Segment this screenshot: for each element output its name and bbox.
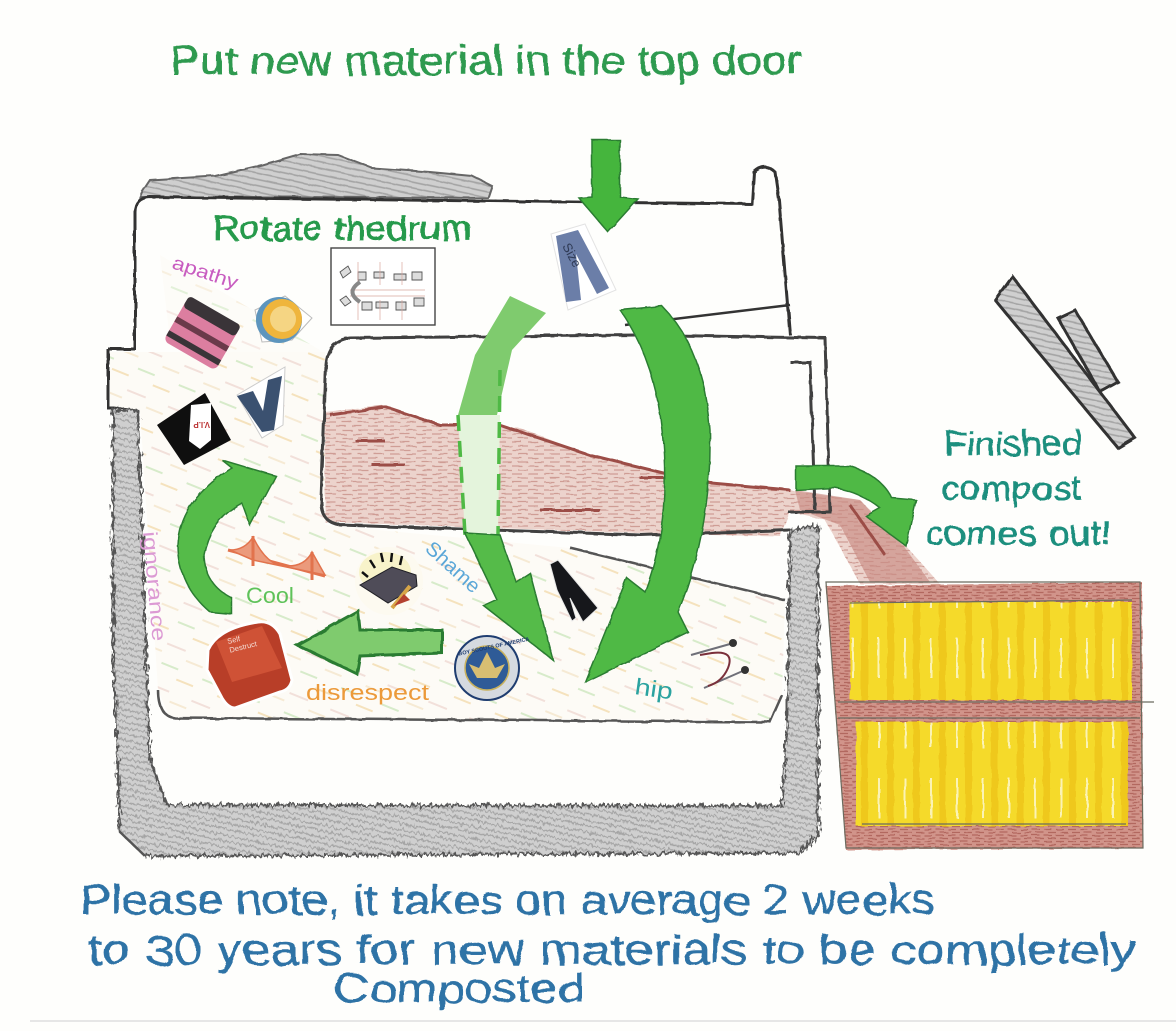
handle short bar xyxy=(1058,310,1118,392)
sticker: scouts badge xyxy=(455,636,530,700)
sticker: orange circle xyxy=(255,296,312,343)
crate bottom yellow panel xyxy=(856,722,1128,826)
label: finished compost xyxy=(925,425,1112,553)
tag text: V.I.P xyxy=(193,420,210,429)
crate frame xyxy=(826,582,1143,850)
label: shame: Shame xyxy=(421,537,484,598)
arrow pale segment xyxy=(458,415,500,535)
sticker: can xyxy=(163,296,241,371)
arrow lower segment xyxy=(465,533,553,660)
drum lower outline xyxy=(158,548,785,722)
label: finished compost: compost xyxy=(941,470,1083,508)
key label: Self xyxy=(226,634,241,646)
label: finished compost: Finished xyxy=(944,425,1082,463)
footer note: to 30 years for new materials to be completely xyxy=(88,926,1136,973)
sticker: VIP tag xyxy=(157,393,231,465)
crate top yellow panel xyxy=(850,602,1132,700)
arrow: compost out xyxy=(796,466,916,546)
sticker: bridge xyxy=(228,536,325,580)
label: hip: hip xyxy=(633,673,675,704)
title: put new material: Put new material in the top door xyxy=(170,39,802,83)
drum crayon hatching xyxy=(110,352,785,720)
bin upper body outline xyxy=(108,167,790,408)
arrow top segment xyxy=(458,296,546,415)
sticker: horseshoe xyxy=(691,639,749,688)
sticker: self destruct key xyxy=(207,622,292,708)
label: apathy: apathy xyxy=(169,253,241,294)
brown compost pile xyxy=(325,405,940,584)
bin lower grey frame xyxy=(113,409,818,856)
key label: Destruct xyxy=(228,639,259,655)
lid hinge line xyxy=(625,305,790,325)
compost chute shading xyxy=(795,490,930,582)
sticker: trousers xyxy=(550,560,598,622)
inner drum window outline xyxy=(321,335,830,535)
arrow: left straight xyxy=(297,611,442,674)
drum side hatching xyxy=(160,255,322,420)
badge text: BOY SCOUTS OF AMERICA xyxy=(458,637,530,658)
bin lid xyxy=(140,154,492,198)
label: disrespect: disrespect xyxy=(306,680,429,705)
handle long bar xyxy=(995,276,1135,448)
arrow: top door xyxy=(579,140,638,232)
footer note xyxy=(80,876,1136,1011)
arrow: large right xyxy=(585,306,710,682)
size text: Size xyxy=(559,240,584,270)
crate outline xyxy=(826,582,1154,848)
sticker: jeans size label xyxy=(551,224,616,310)
label: rotate the drum: Rotate thedrum xyxy=(213,210,472,248)
label: cool: Cool xyxy=(246,583,294,608)
label: ignorance: ignorance xyxy=(138,531,170,642)
sticker: V shape xyxy=(237,367,285,438)
footer note: Please note, it takes on average 2 weeks xyxy=(80,876,935,923)
sticker: book xyxy=(355,547,423,615)
footer note: Composted xyxy=(333,967,585,1011)
sticker: site map xyxy=(331,248,435,325)
compost bin drawing xyxy=(108,154,940,856)
shovel handle xyxy=(995,276,1135,448)
finished compost crate xyxy=(826,582,1154,850)
arrow dashed edges xyxy=(458,370,500,535)
arrow: middle dashed xyxy=(458,296,553,660)
label: finished compost: comes out! xyxy=(925,515,1112,553)
compost surface strokes xyxy=(330,407,885,555)
arrow: left curved xyxy=(178,460,276,614)
